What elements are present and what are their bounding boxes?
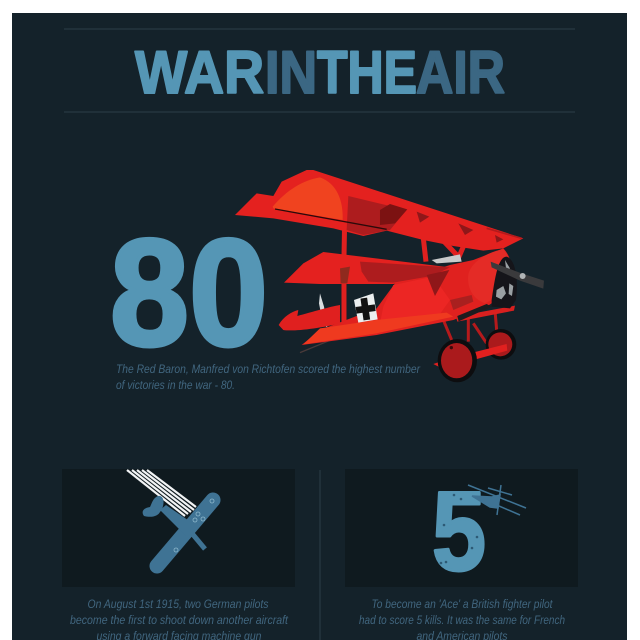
caption: ace: To become an 'Ace' a British fighter pilot	[372, 597, 553, 611]
wheels and undercarriage	[433, 310, 516, 382]
middle wing	[284, 252, 450, 296]
red triplane illustration	[235, 170, 544, 382]
panel: ace	[345, 469, 578, 594]
big number 5: 5	[432, 469, 486, 594]
title: IN	[265, 39, 317, 106]
exhaust strip	[456, 306, 515, 322]
title: AIR	[416, 39, 505, 106]
caption: ace: had to score 5 kills. It was the same for French	[359, 613, 565, 627]
bullet holes	[440, 494, 478, 564]
icon: falling plane	[143, 496, 214, 566]
title: WAR	[135, 39, 264, 106]
red baron caption: The Red Baron, Manfred von Richtofen scored the highest number	[116, 362, 421, 376]
tail fin and tail	[279, 293, 340, 330]
landing skid	[300, 338, 335, 353]
caption: first shoot-down	[70, 597, 289, 640]
bullet trails	[127, 470, 196, 516]
fuselage	[302, 248, 512, 345]
red baron caption: of victories in the war - 80.	[116, 378, 235, 392]
propeller and engine	[491, 257, 544, 308]
title: THE	[317, 39, 417, 106]
title	[135, 39, 505, 106]
caption: ace	[359, 597, 565, 640]
struts	[344, 203, 468, 323]
cockpit machine guns	[432, 254, 462, 263]
caption: first shoot-down: become the first to shoot down another aircraft	[70, 613, 289, 627]
big number 80: 80	[110, 208, 268, 378]
caption: first shoot-down: On August 1st 1915, two German pilots	[88, 597, 268, 611]
iron cross insignia	[354, 293, 378, 323]
panel: first shoot-down	[62, 469, 295, 587]
top wing	[235, 170, 523, 251]
red baron caption	[116, 362, 421, 392]
icon: small biplane	[468, 485, 526, 515]
